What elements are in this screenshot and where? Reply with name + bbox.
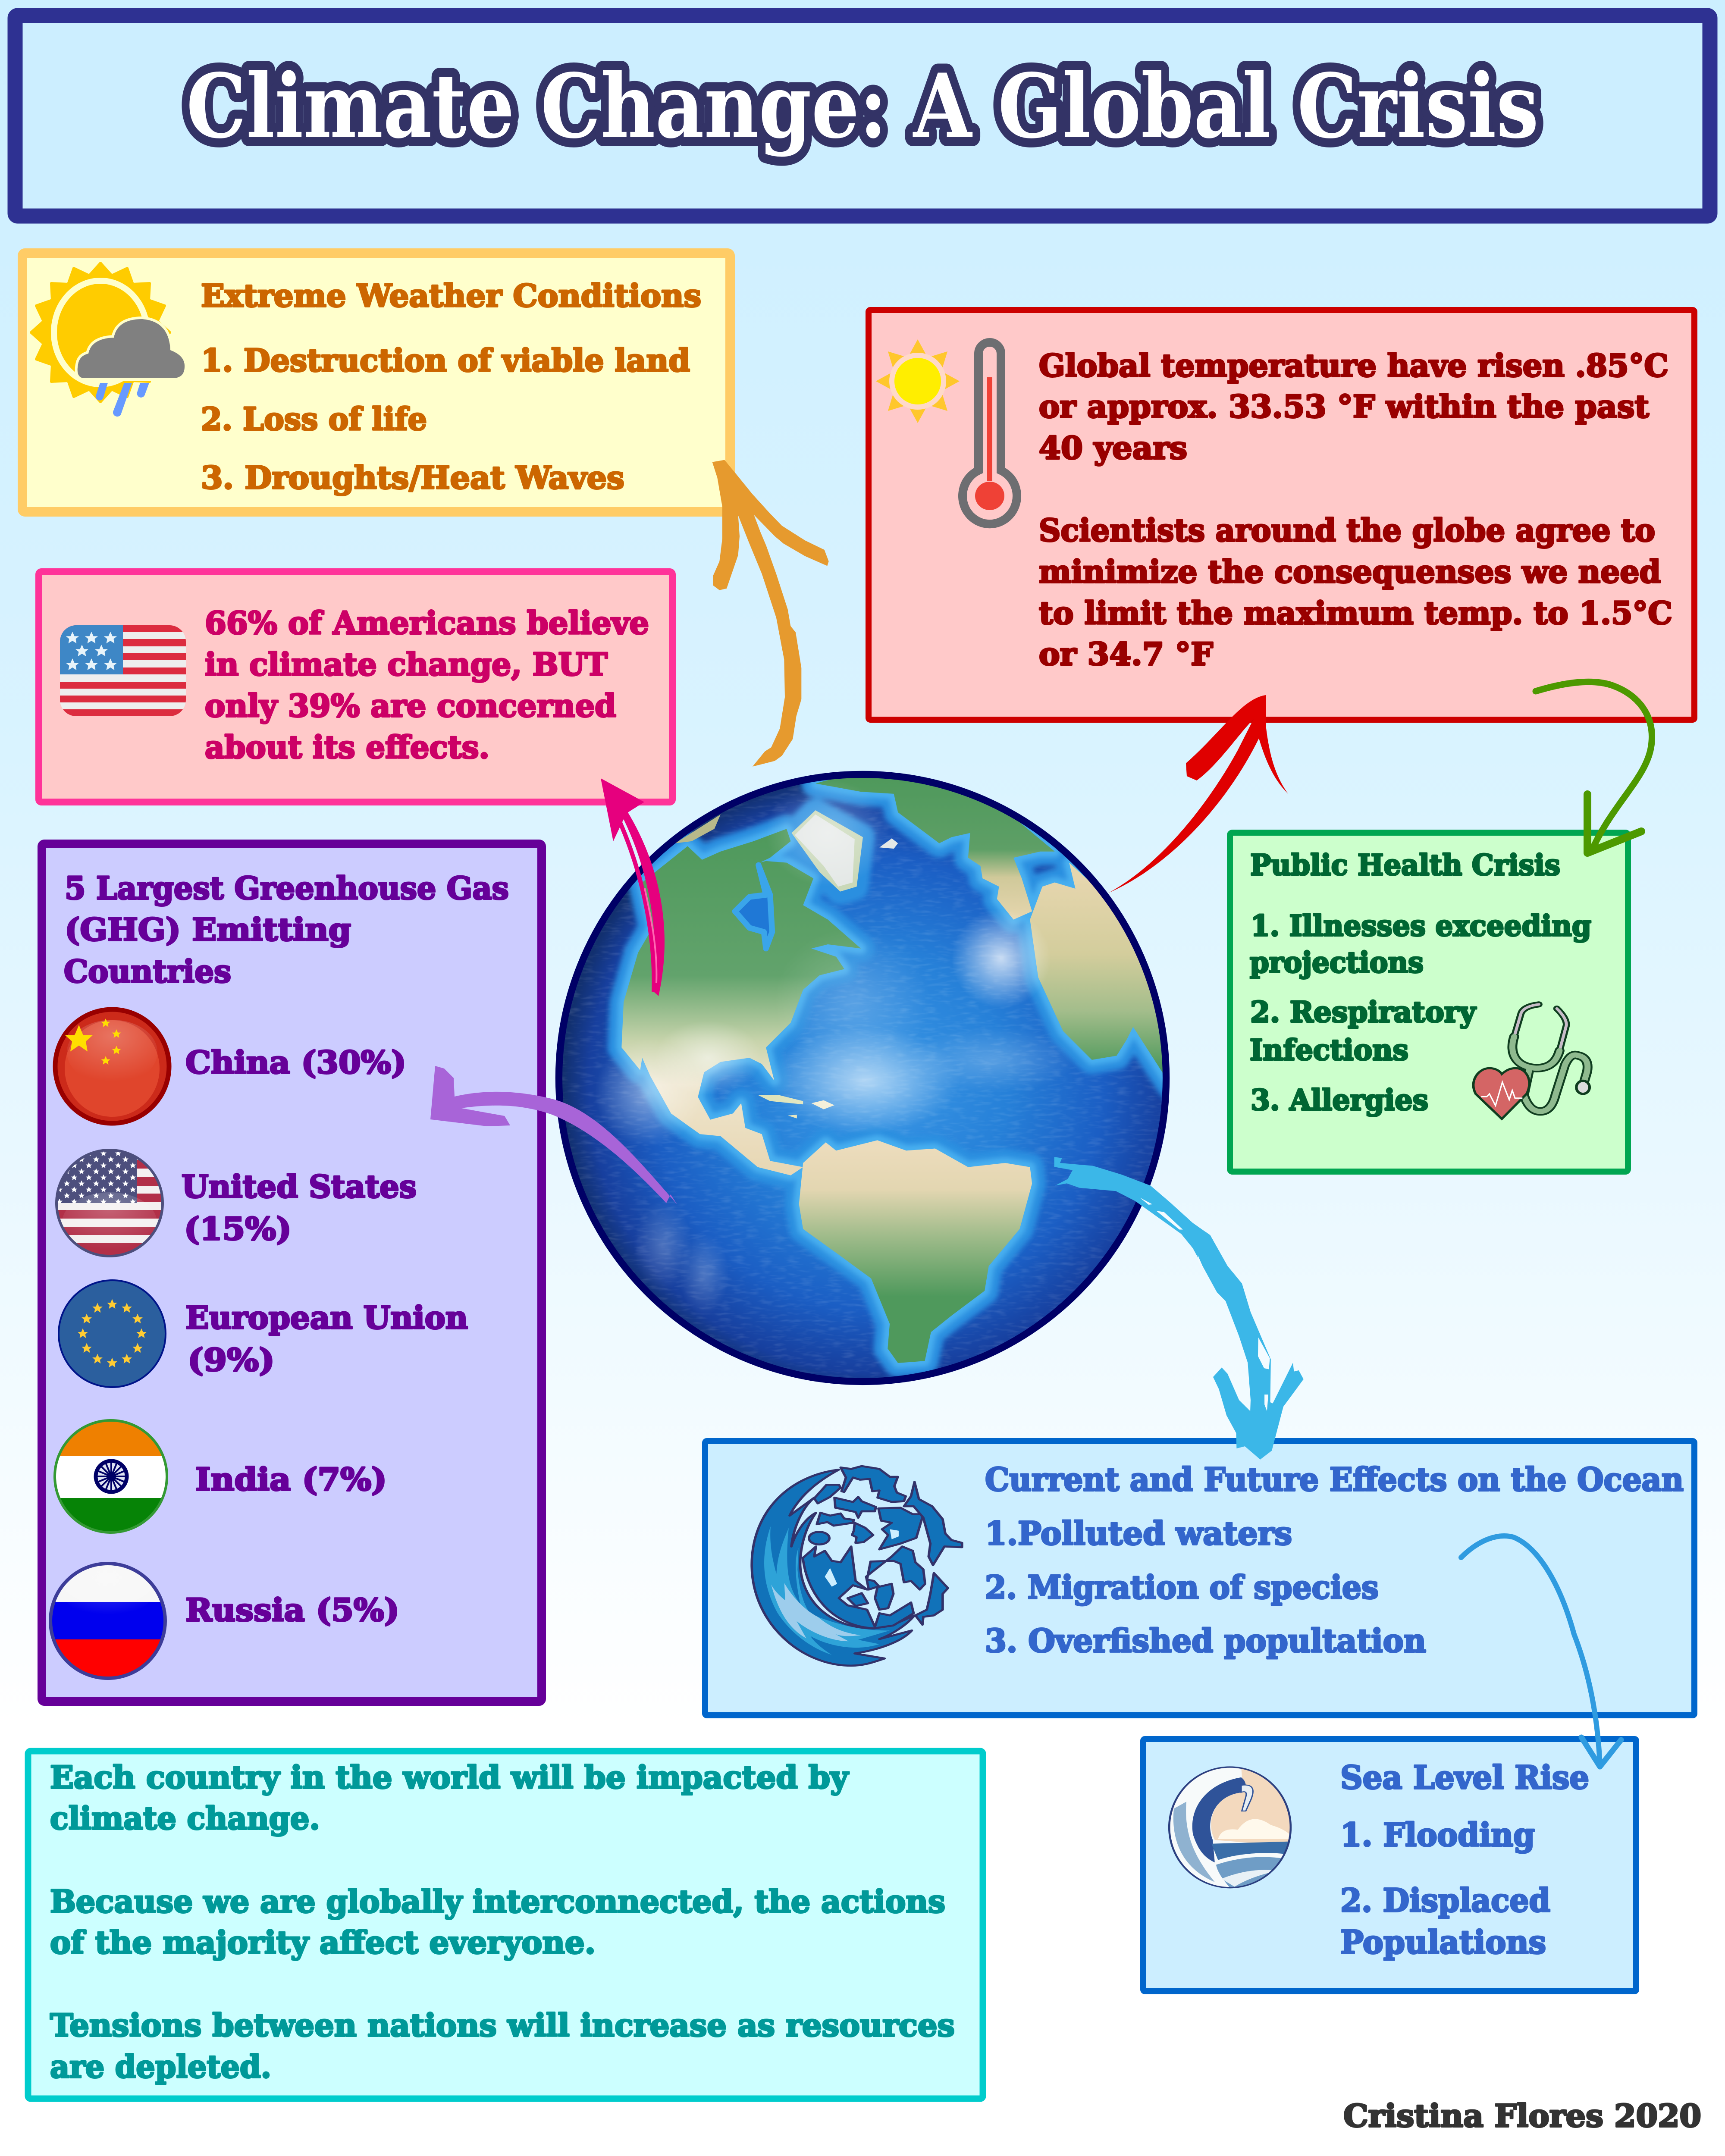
list: 2. Displaced [1340, 1882, 1550, 1919]
label: India: India (7%) [195, 1461, 387, 1498]
list: 1. Destruction of viable land [201, 342, 690, 379]
list: projections [1250, 946, 1424, 979]
icon: sun behind rain cloud [31, 263, 185, 417]
arrow: blue to sea level rise [1461, 1536, 1621, 1767]
panel: sea level rise [1143, 1739, 1636, 1991]
panel frame [28, 1751, 983, 2099]
panel frame [1230, 833, 1628, 1172]
icon: sun [876, 339, 960, 423]
title banner [15, 16, 1710, 216]
arrow: purple to emitters [430, 1066, 677, 1204]
arrow: pink to american opinion [601, 778, 665, 996]
panel frame [42, 844, 542, 1702]
text block [1039, 347, 1672, 672]
label: Russia: Russia (5%) [185, 1592, 399, 1628]
text block: 66% of Americans believe [205, 605, 649, 641]
text block [205, 605, 649, 765]
text block: of the majority affect everyone. [50, 1924, 596, 1961]
label: China: China (30%) [185, 1044, 406, 1081]
flag: European Union [59, 1280, 166, 1387]
list: 1.Polluted waters [985, 1515, 1292, 1552]
globe ocean [558, 774, 1167, 1382]
list: 1. Flooding [1340, 1817, 1535, 1854]
label: United States [182, 1168, 417, 1247]
list [1340, 1817, 1550, 1961]
panel frame [705, 1441, 1694, 1715]
Hudson Bay [735, 865, 772, 949]
icon: stethoscope and heart [1473, 1004, 1590, 1119]
heading [64, 870, 509, 990]
text block: only 39% are concerned [205, 687, 616, 724]
icon: thermometer [963, 342, 1017, 524]
heading: Sea Level Rise [1340, 1759, 1589, 1796]
text block [50, 1759, 955, 2085]
heading: 5 Largest Greenhouse Gas [65, 870, 509, 906]
list: 3. Overfished popultation [985, 1623, 1426, 1660]
text block: in climate change, BUT [205, 646, 608, 683]
panel: greenhouse gas emitters [42, 844, 542, 1702]
heading: Current and Future Effects on the Ocean [985, 1461, 1684, 1498]
list: 1. Illnesses exceeding [1251, 909, 1591, 943]
arrow: red to temperature [1108, 695, 1288, 893]
heading: Public Health Crisis [1250, 848, 1560, 882]
panel: american opinion [39, 572, 672, 802]
arrow: green to public health [1536, 682, 1652, 853]
label: European Union: (9%) [188, 1341, 275, 1378]
panel frame [869, 310, 1694, 720]
label: United States: (15%) [184, 1210, 292, 1247]
globe outline [559, 774, 1166, 1382]
panel: ocean effects [705, 1441, 1694, 1715]
list: 3. Droughts/Heat Waves [201, 459, 624, 496]
list: Infections [1250, 1033, 1408, 1067]
text block: about its effects. [205, 729, 489, 765]
heading: Extreme Weather Conditions [201, 277, 701, 314]
panel: extreme weather [22, 253, 730, 512]
panel frame [22, 253, 730, 512]
text block: 40 years [1039, 429, 1187, 466]
panel: temperature [869, 310, 1694, 720]
list [1250, 909, 1591, 1117]
list: 2. Respiratory [1250, 995, 1477, 1029]
list: Populations [1340, 1924, 1546, 1961]
flag: Russia [49, 1562, 166, 1680]
land masses [621, 829, 861, 1175]
text block: climate change. [50, 1800, 320, 1836]
credit: Cristina Flores 2020 [1343, 2097, 1701, 2134]
globe surface [555, 771, 1170, 1386]
panel: public health [1230, 833, 1628, 1172]
heading: Countries [64, 953, 231, 990]
list: 2. Migration of species [985, 1569, 1379, 1606]
list [985, 1515, 1426, 1660]
text block: Global temperature have risen .85°C [1039, 347, 1669, 384]
text block: Each country in the world will be impacted by [50, 1759, 849, 1796]
text block: or approx. 33.53 °F within the past [1039, 388, 1649, 425]
heading: (GHG) Emitting [65, 911, 351, 948]
arrow: blue to ocean effects [1054, 1157, 1304, 1460]
flag: China [55, 1009, 169, 1123]
flag: India [52, 1419, 170, 1537]
label: United States: United States [182, 1168, 417, 1205]
icon: wave with sea creatures [752, 1466, 962, 1666]
list: 2. Loss of life [201, 401, 427, 437]
text block: Scientists around the globe agree to [1039, 512, 1655, 548]
panel: global impact [28, 1751, 983, 2099]
icon: breaking wave [1167, 1767, 1294, 1890]
text block: Tensions between nations will increase as resources [50, 2007, 955, 2043]
text block: are depleted. [50, 2048, 271, 2085]
label: European Union: European Union [185, 1299, 468, 1336]
coastal shallows [621, 771, 1170, 1363]
list: 3. Allergies [1251, 1083, 1428, 1117]
panel frame [39, 572, 672, 802]
icon: US flag [60, 625, 186, 716]
globe [555, 771, 1170, 1386]
text block: or 34.7 °F [1039, 636, 1213, 672]
flag: United States [56, 1149, 163, 1257]
ocean highlights [952, 909, 1051, 1008]
text block: minimize the consequenses we need [1039, 553, 1661, 590]
title frame [15, 16, 1710, 216]
text block: to limit the maximum temp. to 1.5°C [1039, 595, 1672, 631]
panel frame [1143, 1739, 1636, 1991]
text block: Because we are globally interconnected, the actions [50, 1883, 945, 1920]
list [201, 342, 690, 496]
arrow: orange to extreme weather [712, 460, 829, 767]
label: European Union [185, 1299, 468, 1378]
